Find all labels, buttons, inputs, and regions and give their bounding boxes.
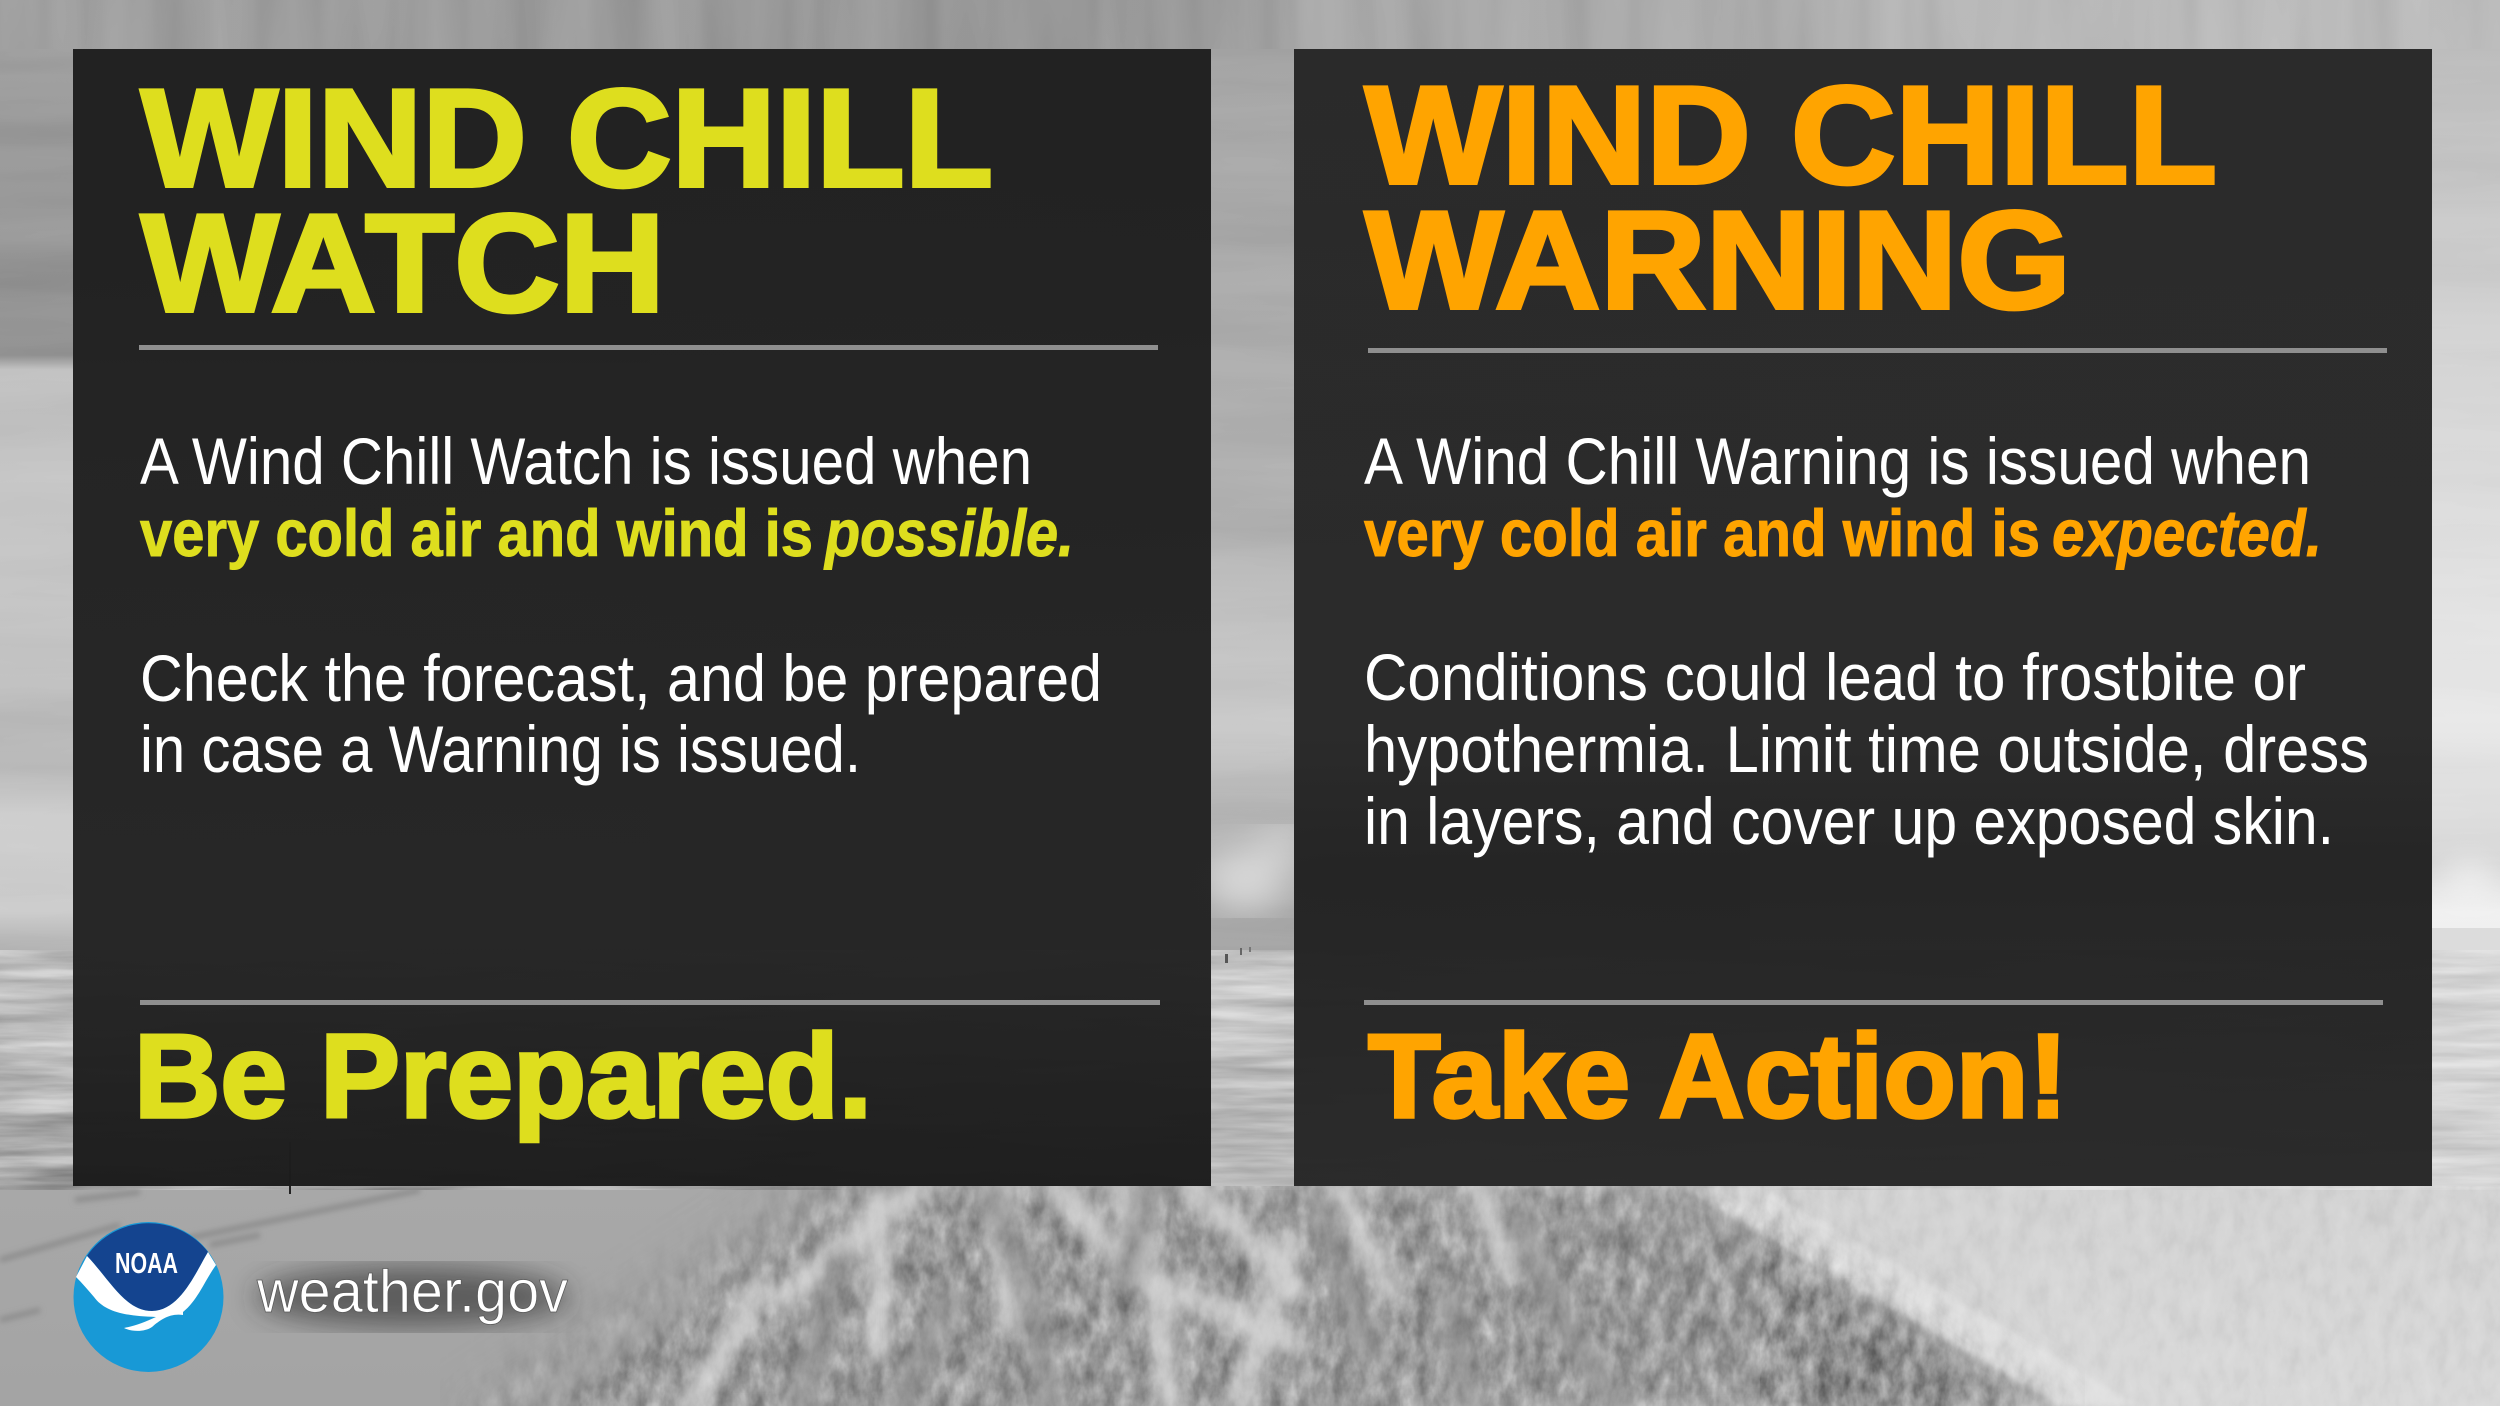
text block: warning advice: Conditions could lead to frostbite or bbox=[1364, 640, 2306, 714]
text block: definition of warning: expected. bbox=[2052, 496, 2322, 570]
text block: definition of watch: possible. bbox=[823, 496, 1074, 570]
snow ground bbox=[0, 950, 1000, 1406]
right snowfield speckle bbox=[1760, 1190, 2378, 1406]
panel: wind chill watch bbox=[73, 49, 1211, 1186]
text block: definition of warning: A Wind Chill Warning is issued when bbox=[1364, 424, 2311, 498]
heading: wind chill warning bbox=[1365, 58, 2217, 338]
text block: definition of watch: very cold air and wind is bbox=[140, 496, 813, 570]
drifting snow over the road bbox=[470, 1186, 2085, 1406]
text block: definition of warning bbox=[1364, 424, 2322, 570]
text block: watch advice: Check the forecast, and be prepared bbox=[140, 641, 1102, 715]
heading: wind chill watch: WIND CHILL bbox=[141, 61, 993, 216]
text block: watch advice: in case a Warning is issued. bbox=[140, 712, 861, 786]
text block: definition of warning: very cold air and wind is bbox=[1364, 496, 2040, 570]
text block: warning advice: in layers, and cover up exposed skin. bbox=[1364, 784, 2334, 858]
call to action: be prepared: Be Prepared. bbox=[134, 1010, 872, 1143]
sky bbox=[0, 153, 73, 950]
fence posts bbox=[289, 947, 1251, 1194]
heading: wind chill warning: WARNING bbox=[1365, 183, 2071, 338]
text block: warning advice bbox=[1364, 640, 2369, 858]
panel: wind chill warning bbox=[1294, 49, 2432, 1186]
website label: weather.gov: weather.gov bbox=[256, 1258, 568, 1325]
text block: warning advice: hypothermia. Limit time outside, dress bbox=[1364, 712, 2369, 786]
call to action: take action: Take Action! bbox=[1368, 1010, 2068, 1143]
text block: watch advice bbox=[140, 641, 1102, 786]
text block: definition of watch bbox=[140, 424, 1074, 570]
heading: wind chill warning: WIND CHILL bbox=[1365, 58, 2217, 213]
heading: wind chill watch bbox=[141, 61, 993, 341]
icon: NOAA logo bbox=[74, 1222, 224, 1372]
text block: definition of watch: A Wind Chill Watch is issued when bbox=[140, 424, 1032, 498]
NOAA wordmark: NOAA bbox=[115, 1248, 178, 1280]
left snow drift marks bbox=[0, 1190, 420, 1320]
heading: wind chill watch: WATCH bbox=[141, 186, 665, 341]
